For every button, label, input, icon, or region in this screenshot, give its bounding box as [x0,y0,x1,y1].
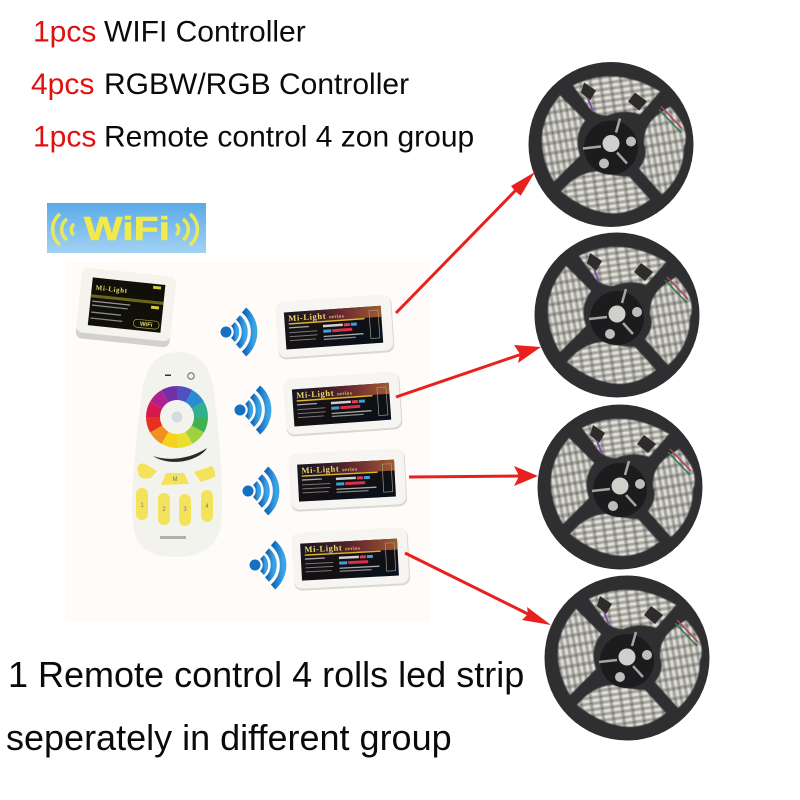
button labels: 1 [140,503,144,509]
box label: Mi-Light [95,284,128,295]
WiFi badge: WiFi [140,322,153,329]
WiFi controller box [75,267,176,348]
caption [6,654,524,758]
caption line 2: seperately in different group [6,717,452,758]
colour wheel [153,393,201,441]
arrow 4 [405,553,551,625]
arrow 2 [396,345,541,397]
controller 1 [275,294,395,360]
product background panel [65,262,430,622]
brand: Mi-Light series [301,462,358,475]
line: RGBW controller: 4pcs [31,68,94,101]
reel 1 [528,62,694,227]
button labels: M [172,477,178,483]
button labels: 4 [205,504,209,510]
arrow 1 [396,172,535,313]
signal icon 3 [242,469,276,513]
zone buttons [136,488,213,526]
button labels: 3 [183,507,187,513]
brand: Mi-Light series [296,386,353,400]
top buttons [137,464,215,485]
controller 2 [283,371,403,437]
arrow 3 [409,466,538,486]
brand: Mi-Light series [288,309,345,323]
reel 2 [534,232,700,398]
reel 4 [544,576,710,740]
line: WIFI controller: WIFI Controller [104,16,306,48]
signal icon 2 [234,388,268,432]
button labels [140,477,209,513]
button labels: 2 [162,507,166,513]
line: remote control: 1pcs [33,120,96,154]
line: WIFI controller: 1pcs [33,16,96,48]
quantity list [31,16,474,154]
caption line 1: 1 Remote control 4 rolls led strip [8,654,524,695]
reel 3 [538,404,702,570]
remote control [132,352,222,557]
brand: Mi-Light series [304,541,361,554]
line: remote control: Remote control 4 zon group [104,120,474,154]
brightness slider [153,448,207,462]
WiFi word: WiFi [84,210,170,247]
wave marks [53,214,197,245]
line: RGBW controller: RGBW/RGB Controller [104,68,409,101]
controller 4 [292,527,410,591]
signal icon 1 [220,310,254,354]
signal icon 4 [250,543,283,587]
WiFi banner [47,203,206,253]
controller 3 [289,448,407,512]
